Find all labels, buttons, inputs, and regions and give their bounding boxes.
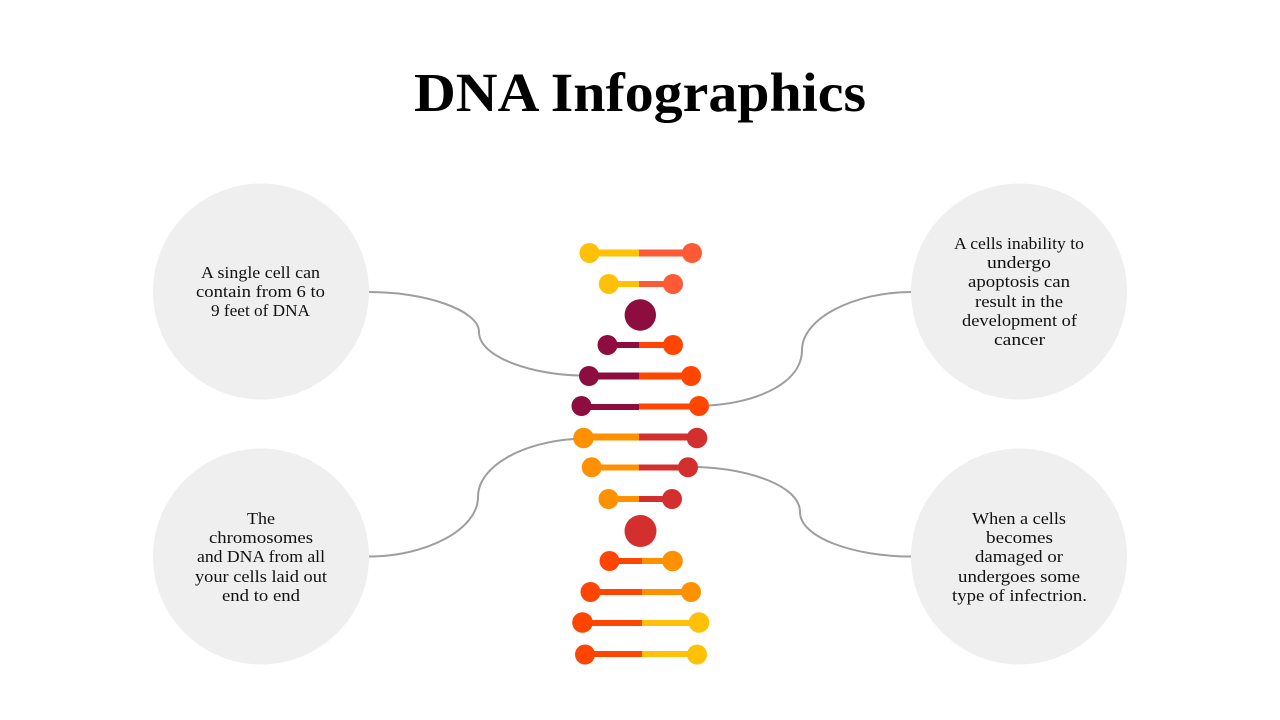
connector: top left <box>369 292 580 376</box>
text: single cell: contain from 6 to <box>196 282 325 301</box>
text: chromosomes <box>195 509 327 605</box>
title: DNA Infographics <box>414 62 866 123</box>
text: infection <box>952 509 1087 605</box>
text: chromosomes: chromosomes <box>209 528 313 547</box>
text: apoptosis: apoptosis can <box>968 272 1071 291</box>
text: infection: damaged or <box>975 547 1063 566</box>
connector: top right <box>709 292 911 406</box>
text: chromosomes: The <box>247 509 275 528</box>
rung 4 <box>579 366 701 386</box>
text: apoptosis: cancer <box>994 330 1045 349</box>
text: infection: undergoes some <box>958 567 1080 586</box>
text: apoptosis: A cells inability to <box>954 234 1084 253</box>
rung 9 <box>600 551 683 571</box>
text: apoptosis: development of <box>962 311 1077 330</box>
rung 8 <box>598 489 682 509</box>
node: lower centre <box>624 515 656 547</box>
rung 2 <box>599 274 683 294</box>
rung 1 <box>580 243 702 263</box>
panel: top right <box>911 184 1127 400</box>
rung 7 <box>582 457 698 477</box>
text: chromosomes: end to end <box>222 586 301 605</box>
text: apoptosis: result in the <box>975 292 1063 311</box>
panel: top left <box>153 184 369 400</box>
text: apoptosis <box>954 234 1084 349</box>
text: single cell: 9 feet of DNA <box>211 301 311 320</box>
text: infection: When a cells <box>972 509 1066 528</box>
text: chromosomes: and DNA from all <box>197 547 325 566</box>
node: upper centre <box>625 299 656 331</box>
text: infection: type of infectrion. <box>952 586 1087 605</box>
panel: bottom right <box>911 448 1127 664</box>
text: apoptosis: undergo <box>987 253 1051 272</box>
panel: bottom left <box>153 448 369 664</box>
rung 11 <box>572 612 709 633</box>
connector: bottom right <box>698 467 911 556</box>
rung 10 <box>580 582 701 602</box>
text: single cell: A single cell can <box>201 263 321 282</box>
chart: DNA helix <box>572 243 709 664</box>
rung 3 <box>598 335 683 355</box>
text: infection: becomes <box>986 528 1053 547</box>
text: chromosomes: your cells laid out <box>195 567 327 586</box>
connector: bottom left <box>369 439 574 556</box>
rung 12 <box>575 644 707 664</box>
text: single cell <box>196 263 325 320</box>
rung 5 <box>572 396 709 416</box>
rung 6 <box>573 428 707 448</box>
